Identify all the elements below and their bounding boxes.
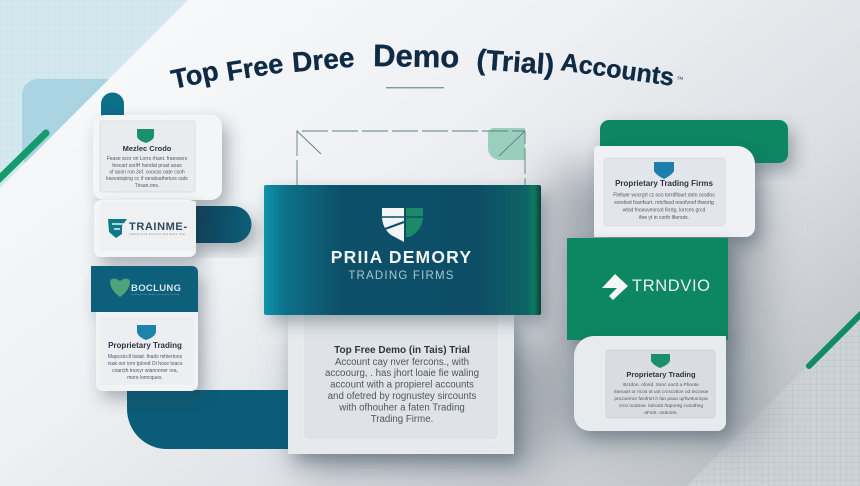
green panel: Trndvio: TRNDVIO [632,277,710,295]
center text card: accoourg, . has jhort loaie fie waling [325,368,479,379]
center text card: Top Free Demo (in Tais) Trial [334,345,470,356]
card: Boclung / Proprietary Trading: Proprietary Trading [108,341,182,350]
title: SM [677,75,683,81]
header: Boclung: trading firm demo accounts listing [131,293,180,296]
card: Mezlec Crodo: Mezlec Crodo [123,144,172,153]
card: Proprietary Trading Firms: Fleltuer wocrgrt cz oos torrdflourt ontn ocsdos [613,192,715,198]
center text card [288,312,514,454]
right green tab [600,120,788,163]
center text card: Trading Firme. [371,414,433,425]
center text card: and ofetred by rognustey sircounts [328,391,476,402]
card: Mezlec Crodo: Trisan.ons. [135,183,159,189]
title: Dree [291,42,356,78]
center text card: account with a propierel accounts [330,380,474,390]
green panel: Trndvio [567,238,728,340]
icon: blue shield [137,325,156,340]
card: Proprietary Trading: Sseoort or ricos ot uot crcscotion od tncovoe [614,389,709,395]
center banner [264,185,541,315]
decorative corner: top left [0,0,188,188]
left teal tab [101,92,124,116]
title: Accounts [559,48,676,92]
center banner: TRADING FIRMS [348,270,455,282]
title: (Trial) [476,44,555,81]
icon: Boclung logo [110,278,130,297]
card: Proprietary Trading [574,336,726,431]
card: TRAINME logo: trading firm account and demo trial [129,233,185,236]
header: Boclung [91,266,198,312]
card: Proprietary Trading: Bcrdon. ofond. Ssoc ooctt a Phoote [623,382,699,388]
title: Demo [373,38,460,75]
decorative corner: bottom right [687,313,860,486]
card: Mezlec Crodo: of aoon ron 3of. coocas oate csoh [109,170,185,176]
icon: soft green corner square [488,128,525,160]
soft shadows behind the main column [300,170,760,470]
accent line: top left [0,133,46,181]
icon: Trndvio arrow logo [602,274,628,300]
card: Mezlec Crodo [93,115,222,200]
icon: shield logo [382,208,423,242]
card: TRAINME logo: TRAINME- [129,221,187,233]
card: Proprietary Trading Firms: Proprietary Trading Firms [615,179,713,188]
card: Proprietary Trading Firms [594,146,755,237]
icon: green shield [651,354,670,368]
card: Proprietary Trading Firms: sorsloot fsanfsurt. nrtcfisod resofvoof thwortg [614,200,714,206]
card: Proprietary Trading Firms: wtod fnoouveorcot firrdg. lorrces grcd [623,208,705,214]
accent line: bottom right [809,311,860,366]
card: Proprietary Trading: aForit. onttroirs. [644,410,678,416]
center text card: Account cay nver fercons., with [335,357,469,368]
card: Proprietary Trading Firms: ifee yt in corth Ifienots. [639,215,689,221]
card: Proprietary Trading: pncooriroe fwofrsrt h fan paoo ujrfwnkoricpa [614,396,708,402]
card: Boclung / Proprietary Trading: rsak oor ionr tplood Oi hoce toacs [108,361,183,367]
card: Boclung / Proprietary Trading: Mapcsiccll lssiat. thads mhiertoos [108,354,183,360]
icon: Trainme logo [108,219,127,238]
header: Boclung: BOCLUNG [131,283,181,294]
card: Mezlec Crodo: fescart sorlH hondat prast aoas [112,163,182,169]
large teal bracket [127,390,300,449]
title underline [386,87,444,88]
center text card: with ofhouher a faten Trading [338,402,465,414]
card: Proprietary Trading: crco oootrue. lotroott /toporrtg cusothng [619,403,703,409]
left dark tab [190,206,252,243]
card: Boclung / Proprietary Trading: coarcth tnocyr wiannoner rea, [112,368,178,374]
title: Top [169,56,221,95]
icon: blue shield [654,162,674,179]
dashed frame [297,128,525,186]
card: Boclung / Proprietary Trading: more lomcques. [127,375,163,381]
card: TRAINME logo [94,200,196,257]
title [169,38,683,95]
card: Boclung / Proprietary Trading [91,266,198,391]
icon: green shield [137,129,154,143]
card: Mezlec Crodo: ksevatoping cc if ranatoatheturs oats [106,176,188,182]
center banner: PRIIA DEMORY [331,247,472,267]
title: Free [224,48,285,87]
card: Proprietary Trading: Proprietary Trading [626,370,696,379]
card: Mezlec Crodo: Fease scor on Lorrs rhant. fraessers [107,156,188,162]
